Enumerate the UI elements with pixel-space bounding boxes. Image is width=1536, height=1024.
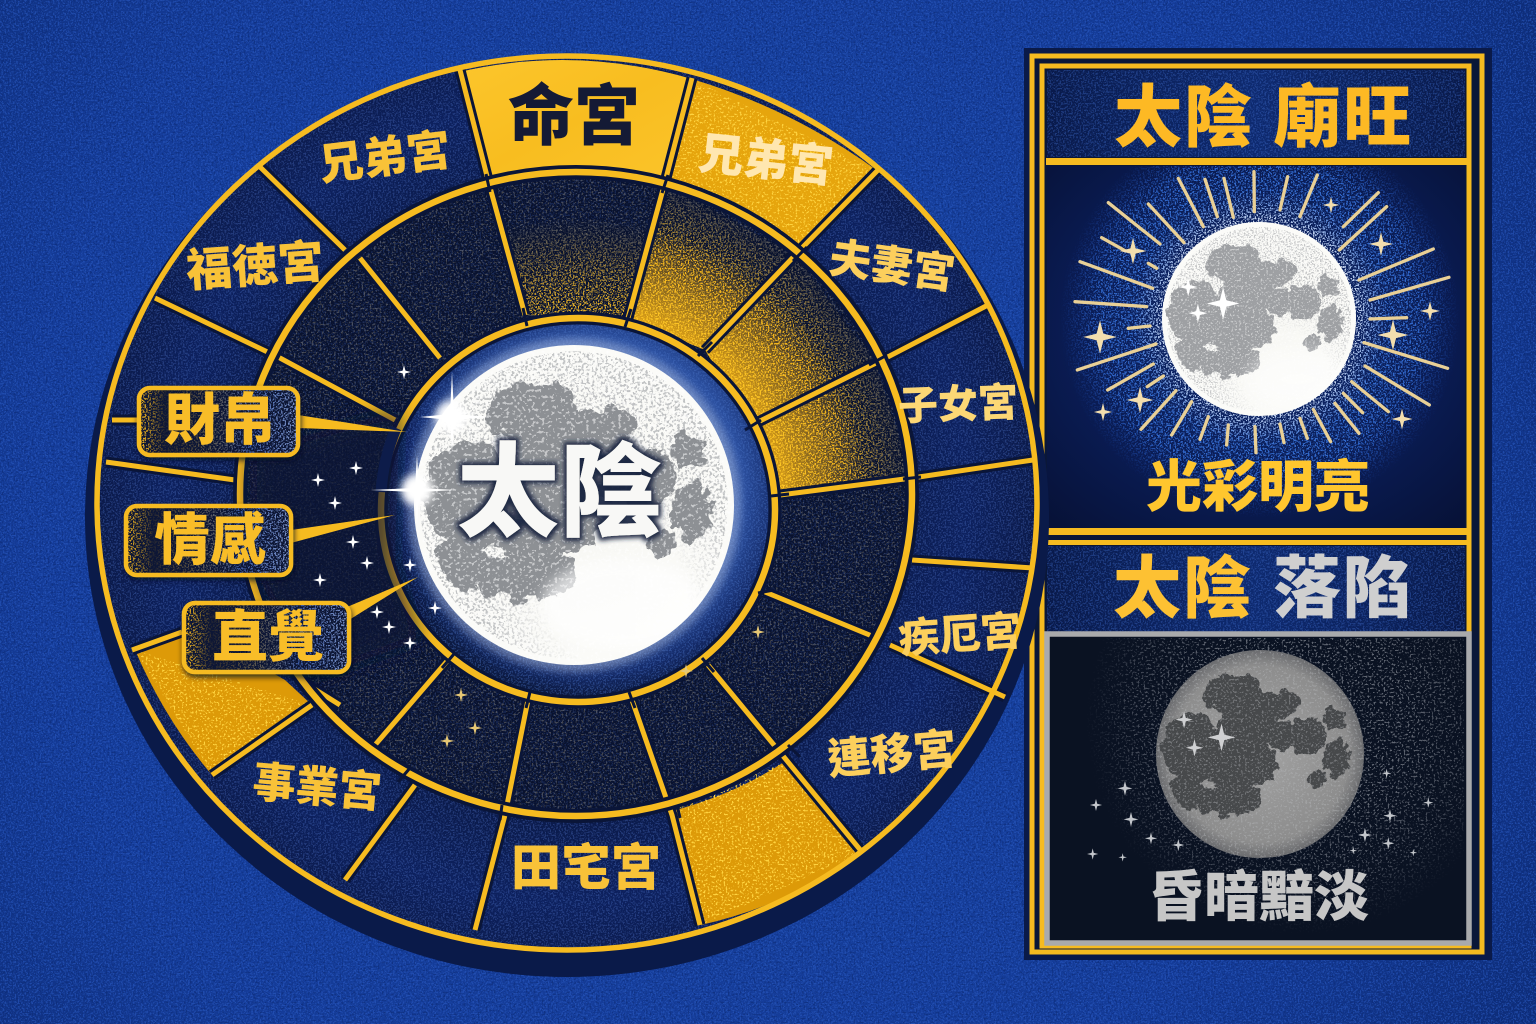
header: 落陷: 落陷 — [1273, 551, 1413, 627]
header: 落陷 — [1047, 546, 1465, 632]
palace labels — [184, 79, 1023, 896]
moon — [1162, 222, 1356, 416]
central moon — [370, 338, 741, 672]
middle ring — [240, 172, 912, 816]
gold sector: right 兄弟宮 — [665, 79, 879, 250]
ring junction gaps — [398, 174, 921, 820]
outer band — [97, 56, 1037, 950]
sparkle left — [370, 455, 456, 525]
gap in ring near sparkle — [381, 428, 396, 492]
halo stipple — [385, 322, 771, 698]
spoke shadows — [106, 70, 1033, 930]
caption: 光彩明亮 — [1146, 456, 1370, 518]
faint stars — [1087, 769, 1433, 862]
moon — [1156, 650, 1364, 858]
gold sector: 命宮 — [459, 60, 692, 182]
夫妻宮: 夫妻宮 — [826, 234, 958, 298]
dark sky left of moon — [250, 410, 420, 680]
panel backing — [1024, 48, 1492, 960]
header: 落陷: 太陰 — [1113, 551, 1253, 627]
callout: 情感 — [126, 506, 395, 575]
callout: 財帛 — [139, 388, 407, 455]
callout: 直覺 — [184, 577, 418, 672]
outer gold frame — [1032, 56, 1482, 952]
田宅宮: 田宅宮 — [511, 840, 661, 896]
caption: 昏暗黯淡 — [1149, 866, 1369, 928]
兄弟宮 right: 兄弟宮 — [696, 128, 836, 192]
inner band — [240, 172, 912, 816]
inner gold frame — [1042, 66, 1469, 946]
gold sector: lower right — [668, 760, 862, 925]
moon title: 太陰 — [457, 436, 663, 550]
callout: 情感: 情感 — [154, 508, 266, 572]
spokes — [106, 70, 1033, 930]
wheel of twelve palaces — [85, 50, 1050, 977]
double divider — [1046, 528, 1468, 545]
header: 廟旺 — [1047, 70, 1465, 157]
rays — [1075, 172, 1449, 453]
事業宮: 事業宮 — [251, 758, 383, 818]
inner ring — [381, 318, 775, 702]
inner band stipple — [230, 170, 930, 820]
bright moon panel — [1047, 166, 1465, 528]
gold stipple glow — [490, 185, 912, 495]
inner ring shadow — [381, 318, 775, 702]
callout: 財帛: 財帛 — [164, 388, 276, 452]
right comparison panel — [1024, 48, 1492, 960]
wheel shadow rim — [85, 57, 1049, 977]
outer ring — [97, 56, 1037, 950]
middle ring shadow — [240, 172, 912, 816]
moon halo — [385, 322, 771, 698]
small gold stars below moon — [440, 625, 765, 748]
header: 廟旺: 廟旺 — [1273, 80, 1413, 156]
gold sector texture — [135, 79, 879, 925]
命宮: 命宮 — [508, 79, 640, 153]
sparkle top-left — [420, 372, 490, 452]
outer band stipple — [90, 50, 1050, 960]
疾厄宮: 疾厄宮 — [897, 608, 1023, 662]
stars left of moon — [311, 365, 442, 650]
gold sector: lower left — [135, 628, 312, 775]
sparkle stars — [1083, 197, 1440, 430]
header: 廟旺: 太陰 — [1114, 80, 1254, 156]
子女宮: 子女宮 — [897, 381, 1019, 429]
inner disc around moon — [381, 318, 775, 702]
callout: 直覺: 直覺 — [212, 606, 324, 668]
divider — [1046, 158, 1468, 165]
福徳宮: 福徳宮 — [184, 235, 326, 297]
dim moon panel — [1047, 634, 1469, 943]
連移宮: 連移宮 — [826, 725, 958, 785]
兄弟宮 left: 兄弟宮 — [317, 126, 453, 190]
